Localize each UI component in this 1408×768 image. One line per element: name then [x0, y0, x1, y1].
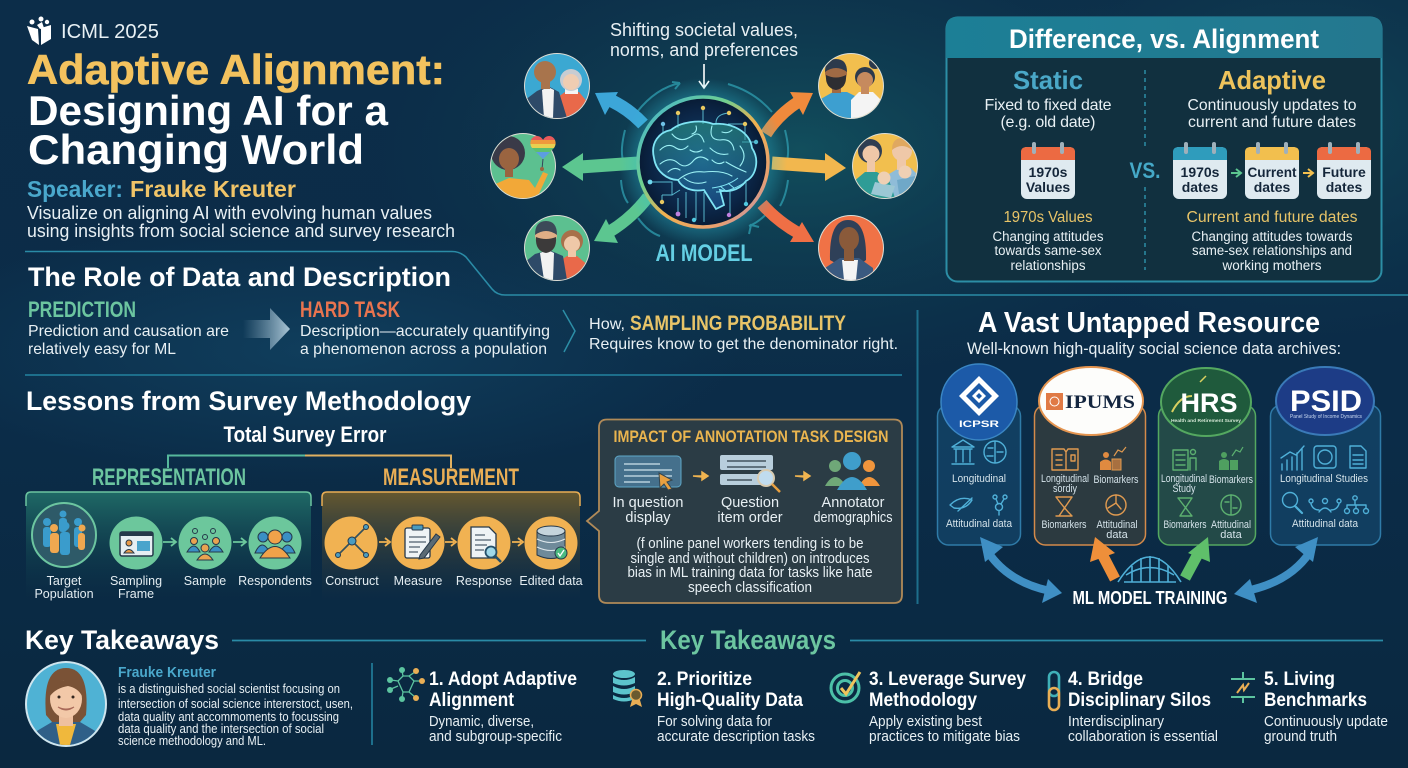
block: sampling probability: Requires know to get the denominator right.	[589, 336, 898, 353]
column: static: Fixed to fixed date	[984, 97, 1112, 114]
labels: HRS: data	[1220, 529, 1243, 541]
icon: calendar future dates	[1317, 142, 1371, 199]
brain emblem	[619, 78, 787, 246]
logo: HRS	[1171, 376, 1242, 423]
block: sampling probability: SAMPLING PROBABILITY	[630, 312, 846, 335]
heading center: Key Takeaways	[660, 625, 836, 655]
takeaway 2 text: For solving data for	[657, 714, 772, 730]
bio: Frauke Kreuter	[118, 665, 216, 681]
column: static	[984, 65, 1112, 273]
takeaway 5 text: Continuously update	[1264, 714, 1388, 730]
caption: shifting values: Shifting societal values,	[610, 20, 798, 40]
arrow: measure to response	[445, 538, 456, 546]
takeaway 1	[387, 667, 577, 745]
card: PSID	[1270, 367, 1380, 545]
arrow: to right family	[772, 153, 846, 181]
block: hard task: Description—accurately quantifying	[300, 323, 550, 340]
bio: intersection of social science intererstoct, usen,	[118, 697, 353, 711]
card: ICPSR	[938, 364, 1020, 545]
labels: measurement steps: Measure	[394, 574, 442, 588]
takeaway 1 text	[429, 668, 577, 745]
arrow: to bottom-left group	[594, 197, 648, 243]
icons: IPUMS	[1052, 449, 1126, 516]
arrow: frame to sample	[163, 538, 176, 546]
takeaway 4	[1049, 668, 1218, 745]
labels: annotation factors: Question	[721, 495, 779, 511]
block: hard task: a phenomenon across a population	[300, 341, 547, 358]
model label: AI MODEL	[656, 240, 752, 267]
column: static: relationships	[1010, 258, 1086, 273]
icons: PSID	[1281, 446, 1368, 514]
column: adaptive: Adaptive	[1218, 65, 1326, 95]
conference logo	[27, 16, 51, 45]
block: prediction: relatively easy for ML	[28, 341, 176, 358]
labels: annotation factors: display	[625, 510, 671, 526]
panel: role of data and description	[28, 262, 898, 358]
panel header	[946, 17, 1382, 58]
takeaway 5	[1231, 668, 1388, 745]
icon: measure	[392, 516, 444, 570]
panel: difference vs alignment	[946, 17, 1382, 282]
column: static: Changing attitudes	[992, 229, 1104, 244]
bio: is a distinguished social scientist focusing on	[118, 682, 340, 696]
arrow: down to model	[699, 64, 709, 88]
takeaway 2	[613, 668, 815, 745]
labels: representation steps	[34, 574, 312, 601]
labels: HRS: Biomarkers	[1209, 474, 1253, 486]
labels: HRS: Study	[1172, 483, 1196, 495]
icon: question item order	[720, 455, 780, 492]
labels: annotation factors: Annotator	[822, 495, 885, 511]
chevron separator	[563, 310, 575, 352]
arrow: ICPSR to training	[980, 537, 1062, 603]
bio: data quality ant accommoments to focussing	[118, 710, 339, 724]
icon: response	[458, 516, 510, 570]
bio	[118, 665, 353, 748]
main title: Adaptive Alignment:	[27, 46, 445, 93]
labels: ICPSR	[946, 473, 1013, 530]
takeaway 2 text: 2. Prioritize	[657, 668, 752, 690]
heading left: Key Takeaways	[25, 625, 219, 655]
labels: PSID: Attitudinal data	[1292, 518, 1359, 530]
labels: HRS: Attitudinal	[1211, 519, 1251, 531]
labels: ICPSR: Attitudinal data	[946, 518, 1013, 530]
takeaway 3 text	[869, 668, 1026, 745]
panel: vast untapped resource	[938, 307, 1380, 608]
caption: shifting values: norms, and preferences	[610, 40, 798, 60]
labels: annotation factors: item order	[717, 510, 783, 526]
main title: Designing AI for a	[28, 87, 389, 134]
icon: sample	[178, 516, 232, 570]
portrait: Frauke Kreuter	[25, 661, 107, 747]
section heading: Lessons from Survey Methodology	[26, 386, 471, 416]
icon: calendar 1970s dates	[1173, 142, 1227, 199]
header block	[27, 16, 455, 241]
conference label: ICML 2025	[61, 21, 159, 43]
takeaway 5 text	[1264, 668, 1388, 745]
arrow: construct to measure	[379, 538, 390, 546]
labels: IPUMS	[1041, 473, 1139, 541]
block: hard task: HARD TASK	[300, 297, 400, 322]
callout body: (f online panel workers tending is to be	[636, 536, 864, 552]
bio: science methodology and ML.	[118, 734, 266, 748]
takeaway 3	[831, 668, 1026, 745]
callout: impact of annotation task design	[587, 420, 902, 603]
column: static: towards same-sex	[994, 243, 1102, 258]
column: adaptive: Current and future dates	[1186, 209, 1358, 226]
summary text: Visualize on aligning AI with evolving human values	[27, 203, 432, 223]
icon: question display	[615, 456, 681, 490]
callout body: single and without children) on introduces	[630, 551, 870, 567]
labels: IPUMS: Biomarkers	[1094, 474, 1139, 486]
takeaway 2 text	[657, 668, 815, 745]
section subtitle: Well-known high-quality social science data archives:	[967, 340, 1341, 358]
icon: calendar 1970s dates: 1970s	[1181, 164, 1220, 180]
panel: key takeaways	[25, 625, 1388, 748]
takeaway 1 text: Dynamic, diverse,	[429, 714, 534, 730]
column: static: (e.g. old date)	[1000, 114, 1096, 131]
arrow: display to order	[693, 472, 708, 480]
panel: measurement flow	[322, 492, 583, 600]
arrow: order to demographics	[795, 472, 810, 480]
icon: respondents	[248, 516, 302, 570]
icon: calendar 1970s dates: dates	[1182, 179, 1218, 195]
takeaway 4 text: collaboration is essential	[1068, 729, 1218, 745]
icon: target check	[831, 672, 860, 702]
arrow: training to IPUMS	[1090, 537, 1115, 579]
card: IPUMS	[1034, 367, 1146, 545]
labels: IPUMS: data	[1106, 529, 1129, 541]
arrow: to future	[1303, 169, 1313, 177]
takeaway 3 text: Apply existing best	[869, 714, 982, 730]
label: ML model training: ML MODEL TRAINING	[1072, 588, 1228, 608]
logo: IPUMS	[1046, 393, 1135, 413]
speaker	[27, 176, 296, 202]
logo: PSID: PSID	[1290, 385, 1362, 418]
brain folds	[660, 126, 746, 183]
arrow: to current	[1231, 169, 1241, 177]
labels: PSID	[1280, 473, 1368, 530]
callout body: bias in ML training data for tasks like hate	[628, 565, 872, 581]
speaker: Speaker:	[27, 176, 123, 202]
speaker: Frauke Kreuter	[130, 176, 296, 202]
orbit arcs	[621, 82, 788, 236]
takeaway 4 text: 4. Bridge	[1068, 668, 1143, 690]
labels: annotation factors: demographics	[814, 510, 892, 526]
person: older couple	[524, 53, 590, 119]
column: adaptive: current and future dates	[1188, 114, 1356, 131]
arrow: PSID to training	[1234, 537, 1318, 603]
circuit traces	[650, 108, 756, 222]
icon: sampling frame	[110, 516, 162, 570]
column: adaptive: Continuously updates to	[1188, 97, 1357, 114]
takeaway 4 text: Interdisciplinary	[1068, 714, 1165, 730]
panel: AI model hub	[490, 20, 918, 281]
labels: HRS: Longitudinal	[1161, 473, 1207, 485]
logo: ICPSR	[959, 376, 999, 430]
panel: lessons from survey methodology	[26, 386, 583, 601]
icons: ICPSR	[950, 440, 1007, 515]
person: woman on orange	[818, 215, 884, 281]
takeaway 1 text: 1. Adopt Adaptive	[429, 668, 577, 690]
labels: representation steps: Target	[47, 574, 82, 588]
labels: measurement steps	[325, 574, 583, 588]
bio: data quality and the intersection of social	[118, 722, 324, 736]
logo: IPUMS: IPUMS	[1065, 393, 1135, 413]
labels: measurement steps: Edited data	[519, 574, 583, 588]
takeaway 2 text: accurate description tasks	[657, 729, 815, 745]
block: prediction: PREDICTION	[28, 297, 136, 322]
arrow: response to edited data	[512, 538, 523, 546]
section heading: The Role of Data and Description	[28, 262, 451, 292]
takeaway 1 text: and subgroup-specific	[429, 729, 562, 745]
logo: HRS: Health and Retirement Survey	[1171, 418, 1242, 423]
column: adaptive: same-sex relationships and	[1192, 243, 1352, 258]
icon: network	[387, 667, 425, 702]
labels: HRS	[1161, 473, 1253, 541]
takeaway 5 text: Benchmarks	[1264, 689, 1367, 711]
labels: representation steps: Sampling	[110, 574, 162, 588]
callout body	[628, 536, 872, 596]
icon: calendar 1970s values: Values	[1026, 179, 1070, 195]
summary text	[27, 203, 455, 241]
arrow: sample to respondents	[233, 538, 246, 546]
versus label: VS.	[1130, 158, 1160, 183]
labels: PSID: Longitudinal Studies	[1280, 473, 1368, 485]
block: sampling probability: How,	[589, 316, 625, 333]
column: static: 1970s Values	[1004, 209, 1093, 226]
logo: HRS: HRS	[1180, 388, 1238, 418]
logo: ICPSR: ICPSR	[959, 419, 999, 430]
icon: calendar future dates: dates	[1326, 179, 1362, 195]
icon: calendar future dates: Future	[1322, 164, 1366, 180]
takeaway 4 text	[1068, 668, 1218, 745]
labels: representation steps: Frame	[118, 587, 154, 601]
block: prediction: Prediction and causation are	[28, 323, 229, 340]
arrow: to top-right group	[766, 92, 813, 134]
arrow: to left person	[562, 153, 638, 181]
icon: calendar current dates	[1245, 142, 1299, 199]
takeaway 1 text: Alignment	[429, 689, 514, 711]
icon: calendar current dates: Current	[1248, 164, 1297, 180]
caption: shifting values	[610, 20, 798, 60]
labels: IPUMS: Attitudinal	[1096, 519, 1138, 531]
icon: annotator demographics	[825, 452, 880, 490]
column: adaptive	[1173, 65, 1371, 273]
labels: ICPSR: Longitudinal	[952, 473, 1006, 485]
takeaway 3 text: 3. Leverage Survey	[869, 668, 1026, 690]
column: static: Static	[1013, 65, 1083, 95]
labels: representation steps: Respondents	[238, 574, 312, 588]
icon: bridge	[1118, 556, 1181, 582]
main title: Changing World	[28, 126, 364, 173]
person: couple on yellow	[818, 53, 884, 119]
icon: calendar current dates: dates	[1254, 179, 1290, 195]
label: representation: REPRESENTATION	[92, 464, 246, 491]
labels: representation steps: Sample	[184, 574, 226, 588]
icon: benchmark	[1231, 672, 1255, 703]
labels: annotation factors	[613, 495, 892, 526]
panel: representation flow	[26, 492, 312, 601]
decorative divider: header outline	[25, 252, 1408, 295]
labels: IPUMS: Biomarkers	[1042, 519, 1087, 531]
block: hard task	[300, 297, 550, 358]
subheading: total survey error: Total Survey Error	[224, 422, 387, 447]
bracket	[168, 456, 451, 468]
icon: target population	[32, 503, 96, 567]
labels: measurement steps: Construct	[325, 574, 379, 588]
card: HRS	[1158, 368, 1256, 545]
person: family with baby	[852, 133, 918, 199]
arrow: training to HRS	[1185, 537, 1210, 578]
arrow: prediction to hard task	[243, 308, 290, 350]
icon: construct	[324, 516, 378, 570]
labels: measurement steps: Response	[456, 574, 512, 588]
block: prediction	[28, 297, 229, 358]
takeaway 3 text: Methodology	[869, 689, 977, 711]
takeaway 5 text: ground truth	[1264, 729, 1337, 745]
callout body: speech classification	[688, 580, 812, 596]
labels: HRS: Biomarkers	[1164, 519, 1207, 531]
person: bearded man and woman	[524, 215, 590, 281]
arrow: to bottom-right person	[762, 204, 814, 242]
takeaway 3 text: practices to mitigate bias	[869, 729, 1020, 745]
icons: HRS	[1173, 450, 1241, 516]
labels: IPUMS: sordiy	[1053, 483, 1077, 495]
icon: database medal	[613, 670, 642, 707]
panel header: Difference, vs. Alignment	[1009, 24, 1319, 54]
callout title: IMPACT OF ANNOTATION TASK DESIGN	[614, 427, 888, 446]
icon: calendar 1970s values	[1021, 142, 1075, 199]
icon: chain link	[1049, 672, 1059, 710]
icon: edited data	[524, 516, 578, 570]
summary text: using insights from social science and survey research	[27, 221, 455, 241]
label: measurement: MEASUREMENT	[383, 464, 519, 491]
block: sampling probability	[589, 312, 898, 353]
main title	[27, 46, 445, 173]
person: woman with rainbow heart	[490, 133, 560, 199]
labels: annotation factors: In question	[613, 495, 683, 511]
takeaway 4 text: Disciplinary Silos	[1068, 689, 1211, 711]
takeaway 2 text: High-Quality Data	[657, 689, 803, 711]
icon: calendar 1970s values: 1970s	[1029, 164, 1068, 180]
section heading: A Vast Untapped Resource	[978, 307, 1320, 339]
brain outline	[653, 122, 756, 209]
column: adaptive: Changing attitudes towards	[1192, 229, 1353, 244]
arrow: to top-left group	[595, 92, 643, 124]
labels: IPUMS: Longitudinal	[1041, 473, 1089, 485]
labels: representation steps: Population	[34, 587, 94, 601]
column: adaptive: working mothers	[1222, 258, 1322, 273]
takeaway 5 text: 5. Living	[1264, 668, 1335, 690]
logo: PSID: Panel Study of Income Dynamics	[1290, 414, 1362, 420]
